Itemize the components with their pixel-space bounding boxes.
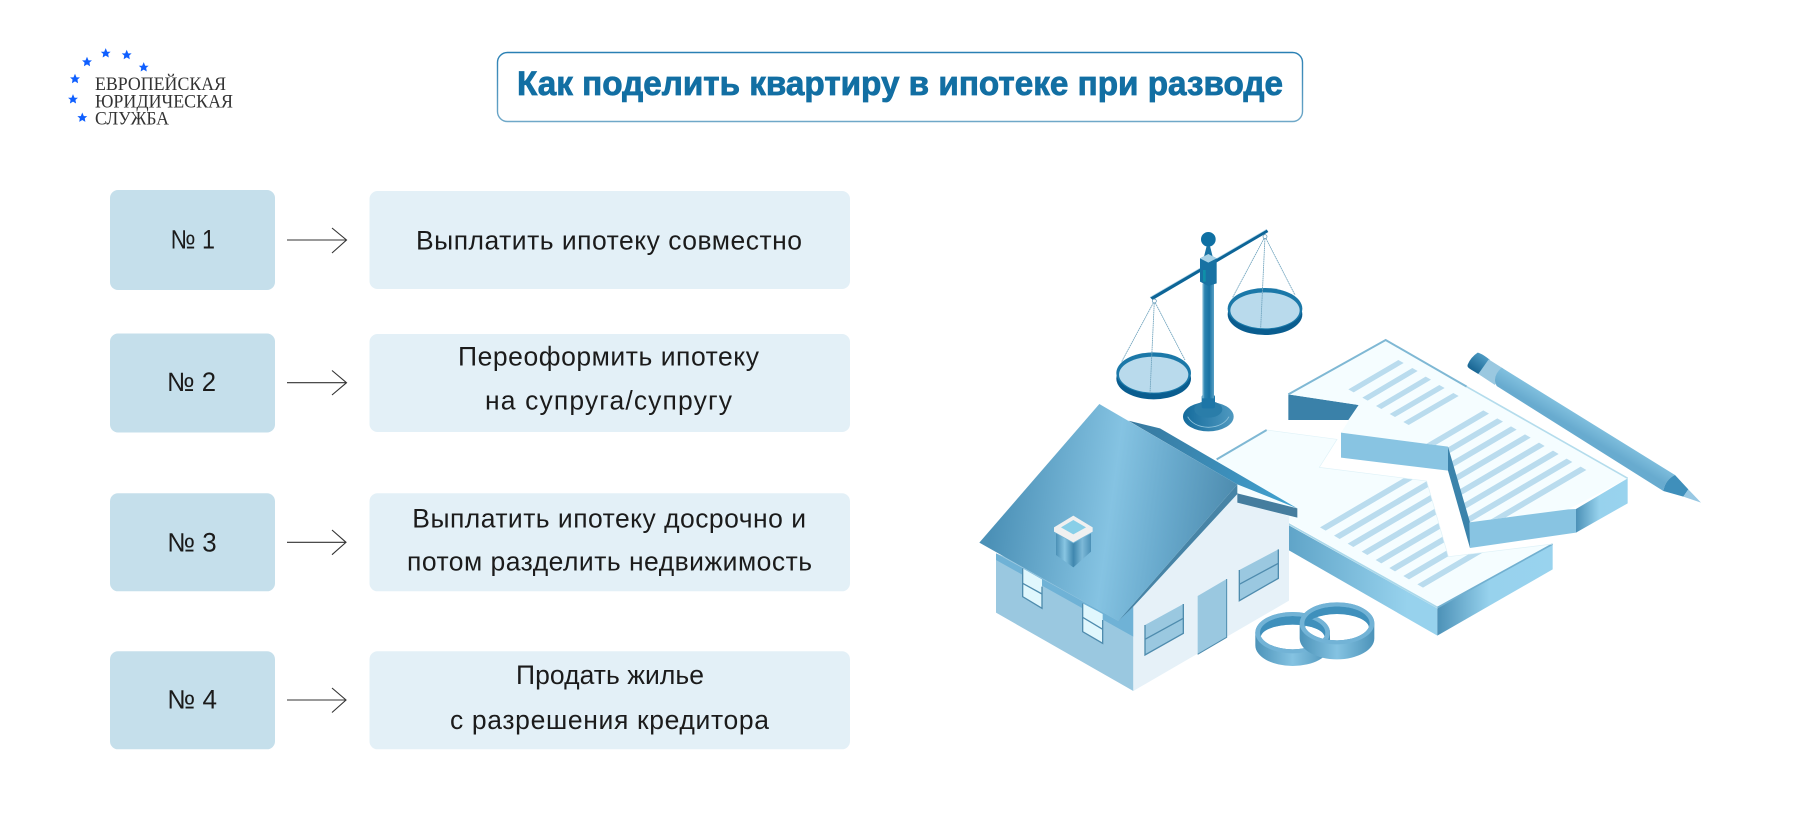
- logo wordmark: СЛУЖБА: [95, 110, 170, 130]
- title: [498, 52, 1302, 122]
- house walls: [996, 493, 1289, 691]
- option 4: [110, 651, 850, 749]
- option 4: Продать жилье: [516, 660, 704, 690]
- option 1: № 1: [170, 224, 215, 254]
- option 2: [110, 334, 850, 432]
- roof: [979, 404, 1297, 621]
- illustration: [979, 229, 1701, 691]
- options list: [110, 190, 850, 749]
- option 4: с разрешения кредитора: [450, 705, 769, 735]
- option 1: [110, 190, 850, 290]
- scale beam: [1150, 229, 1268, 300]
- option 2: Переоформить ипотеку: [458, 342, 760, 372]
- logo wordmark: ЮРИДИЧЕСКАЯ: [95, 92, 233, 112]
- left pan: [1116, 299, 1191, 399]
- option 2: № 2: [167, 367, 216, 397]
- option 3: Выплатить ипотеку досрочно и: [412, 504, 806, 534]
- logo: [68, 48, 233, 130]
- option 4: № 4: [167, 685, 217, 715]
- icon: house: [979, 404, 1297, 691]
- option 3: № 3: [167, 527, 217, 557]
- option 1: Выплатить ипотеку совместно: [416, 225, 802, 255]
- lower paper half: [1199, 430, 1556, 636]
- ring two: [1300, 602, 1374, 659]
- icon: wedding rings: [1255, 602, 1374, 666]
- title: Как поделить квартиру в ипотеке при разводе: [517, 65, 1283, 103]
- document torn in two: [1199, 339, 1628, 636]
- option 3: [110, 493, 850, 591]
- right pan: [1228, 235, 1302, 335]
- logo wordmark: [95, 74, 233, 130]
- logo stars: [68, 48, 149, 122]
- option 3: потом разделить недвижимость: [407, 547, 812, 577]
- front wall windows and door: [1145, 549, 1278, 655]
- icon: pencil: [1467, 353, 1701, 503]
- option 2: на супруга/супругу: [485, 385, 733, 415]
- left wall windows: [1023, 568, 1103, 643]
- ring one: [1255, 612, 1330, 666]
- scale post and base: [1183, 283, 1234, 431]
- icon: scales of justice: [1116, 229, 1302, 431]
- logo wordmark: ЕВРОПЕЙСКАЯ: [95, 74, 226, 95]
- upper paper half: [1288, 339, 1628, 548]
- chimney: [1054, 516, 1093, 567]
